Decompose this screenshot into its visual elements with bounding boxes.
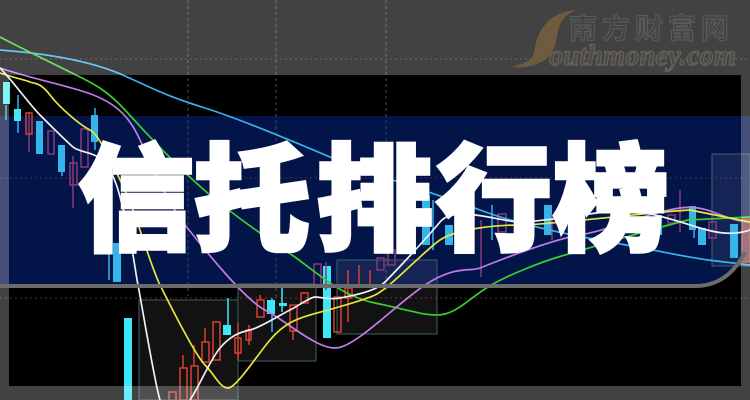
- title: 托: [194, 107, 310, 275]
- panel: dark blue title band: [0, 116, 750, 284]
- line: blue moving average: [0, 50, 750, 265]
- icon: brown S swoosh: [512, 10, 576, 67]
- watermark domain: outhmoney.com: [549, 39, 736, 72]
- magenta candles in band: [29, 112, 716, 290]
- title: 榜: [553, 107, 669, 275]
- logo: Southmoney watermark: [512, 7, 736, 72]
- orange candle at right edge: [742, 219, 750, 262]
- cyan candles: [3, 82, 738, 400]
- chart highlight boxes: [139, 154, 750, 400]
- line: yellow moving average: [0, 73, 750, 388]
- line: white moving average, falling: [0, 68, 160, 400]
- title: 排: [317, 107, 433, 275]
- candlestick chart: [3, 82, 750, 400]
- line: purple moving average: [0, 68, 750, 348]
- line: white moving average, rising: [190, 210, 750, 400]
- title: 信: [78, 107, 194, 275]
- title: [78, 107, 669, 275]
- title: 行: [436, 107, 552, 275]
- line: green moving average: [0, 37, 750, 315]
- red candles: [26, 113, 370, 400]
- band bottom edge: [0, 252, 745, 286]
- watermark chinese name: 南方财富网: [569, 7, 734, 47]
